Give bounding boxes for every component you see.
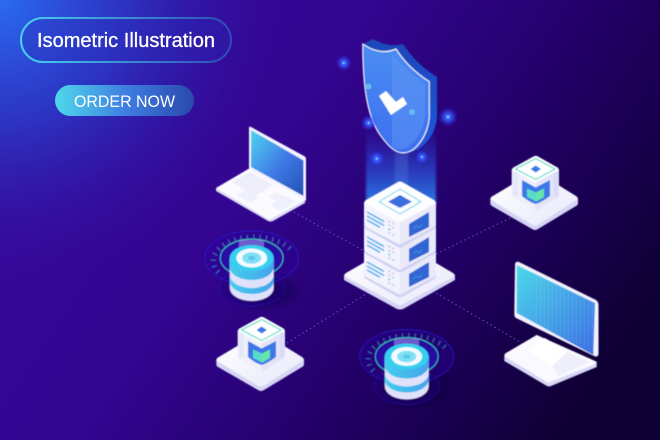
dotted network connectors bbox=[287, 210, 520, 343]
button: ORDER NOW bbox=[55, 85, 194, 116]
icon: desktop monitor bbox=[504, 262, 598, 386]
server top face bbox=[364, 182, 436, 222]
check mark bbox=[379, 91, 407, 115]
icon: laptop bbox=[216, 127, 306, 222]
data cylinder, left bbox=[205, 231, 304, 312]
server tiers bbox=[364, 202, 436, 298]
server base plate bbox=[344, 241, 455, 310]
button: ORDER NOW: ORDER NOW bbox=[74, 92, 175, 111]
shield side bbox=[363, 39, 437, 153]
monitor screen bbox=[514, 262, 598, 357]
energy beam from server to shield bbox=[366, 125, 436, 205]
monitor stand bbox=[530, 338, 567, 366]
icon: security shield bbox=[363, 39, 437, 153]
server module, right bbox=[490, 156, 578, 230]
central server stack bbox=[344, 182, 455, 310]
glowing particles bbox=[336, 55, 458, 167]
data cylinder, bottom centre bbox=[360, 330, 459, 410]
title pill: Isometric Illustration bbox=[21, 18, 231, 62]
title pill: Isometric Illustration: Isometric Illustration bbox=[37, 30, 215, 52]
shield front bbox=[363, 44, 429, 153]
monitor base bbox=[504, 335, 597, 386]
server module, lower left bbox=[216, 317, 304, 391]
